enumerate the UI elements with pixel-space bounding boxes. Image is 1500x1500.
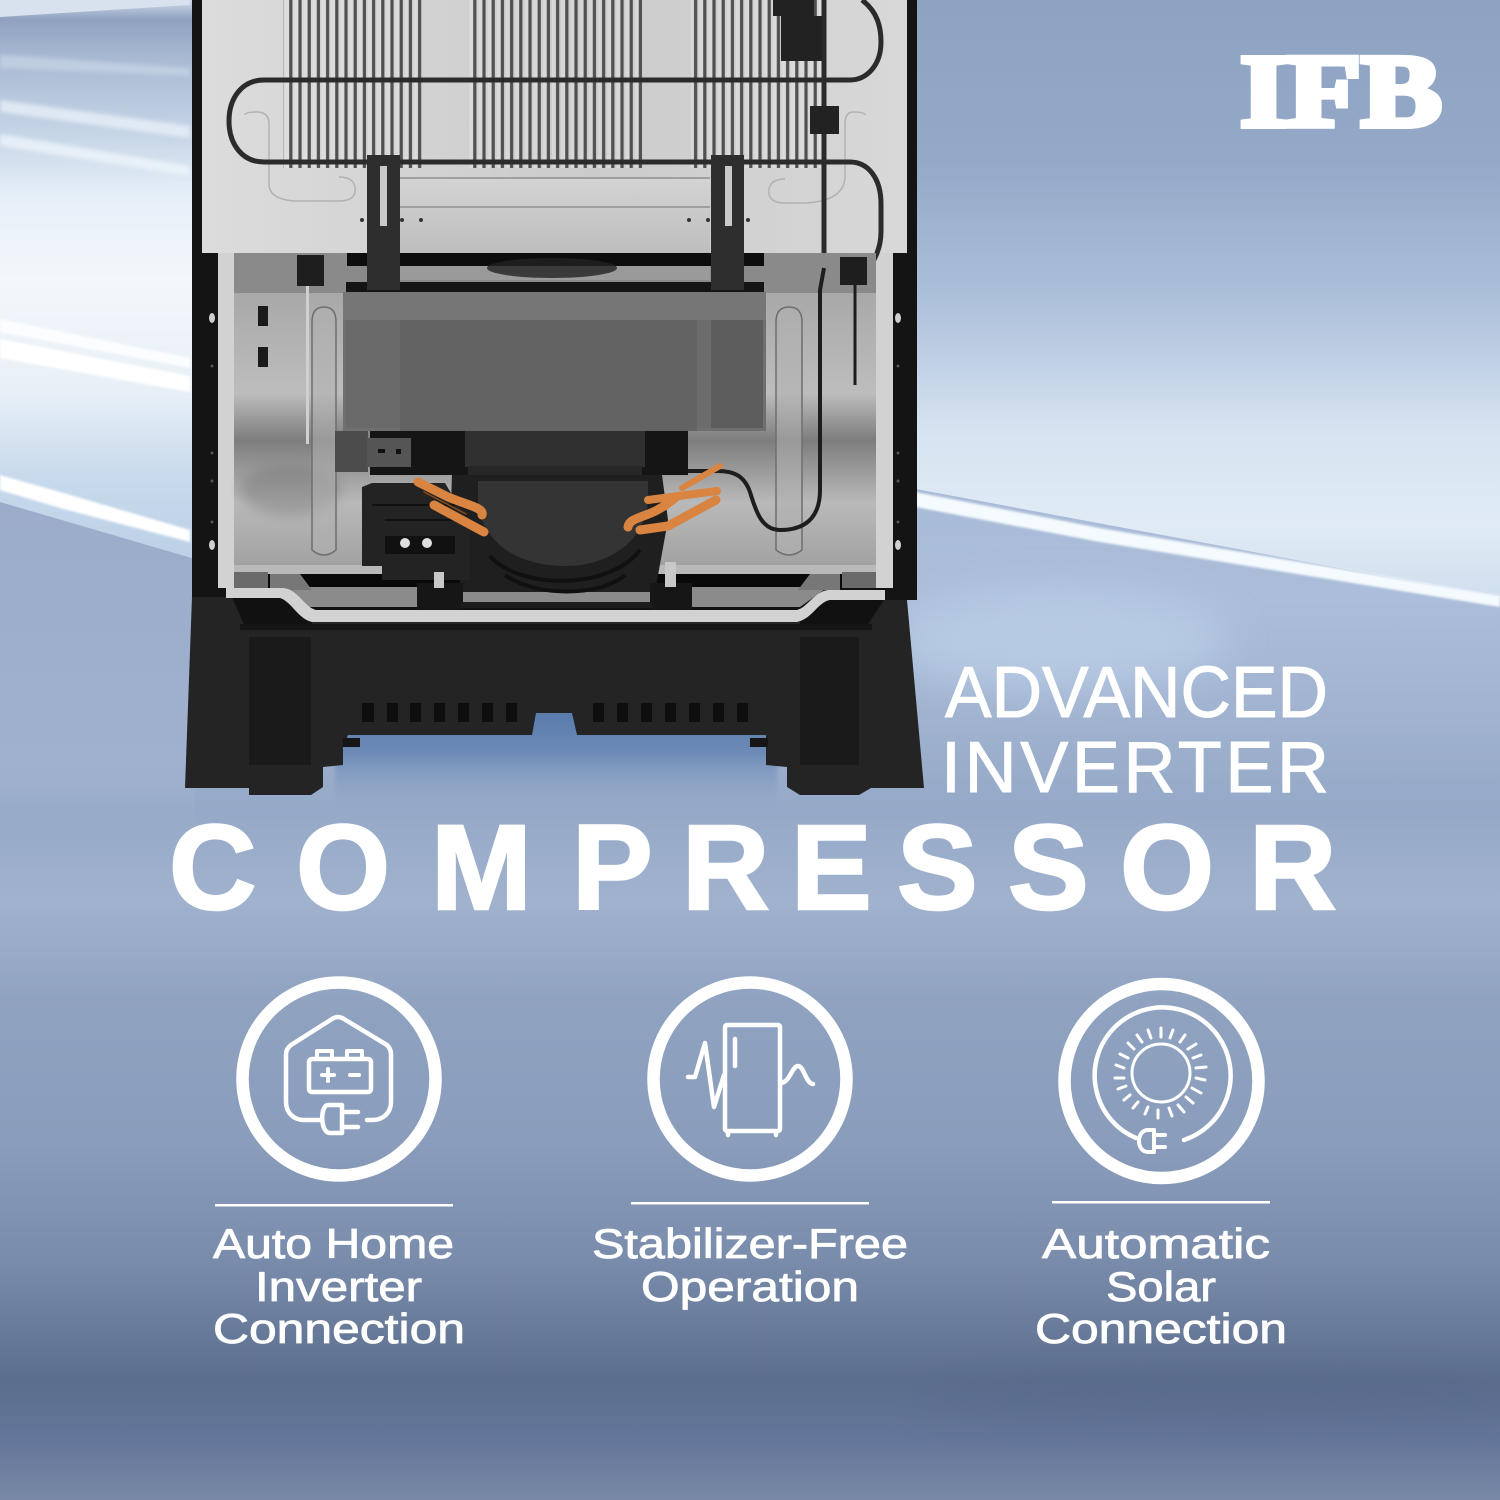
floor ledge and rails	[225, 565, 885, 640]
label: Automatic	[1042, 1220, 1270, 1267]
condenser fins	[283, 0, 823, 168]
compressor	[335, 431, 688, 592]
compressor orange tubes	[418, 466, 720, 532]
condenser tube	[229, 0, 881, 295]
clamp blocks on tube	[773, 0, 839, 134]
label	[213, 1220, 465, 1352]
label: Inverter	[255, 1263, 422, 1310]
base vents	[362, 703, 748, 722]
heading: Advanced Inverter Compressor: COMPRESSOR	[169, 799, 1336, 935]
label: Stabilizer-Free	[592, 1220, 908, 1267]
icon: fridge with waveform	[654, 982, 846, 1176]
feature: stabilizer-free operation	[592, 982, 908, 1310]
label	[1035, 1220, 1287, 1352]
plastic base	[185, 597, 924, 795]
label: Connection	[213, 1305, 465, 1352]
mounting brackets	[367, 155, 744, 290]
fridge side walls	[192, 0, 917, 600]
heading: Advanced Inverter Compressor	[169, 653, 1336, 935]
divider	[1052, 1201, 1270, 1204]
refrigerator	[185, 0, 924, 810]
divider	[631, 1202, 869, 1204]
heading: Advanced Inverter Compressor: INVERTER	[941, 728, 1329, 808]
label: Operation	[641, 1263, 859, 1310]
icon: house battery plug	[242, 982, 436, 1176]
heading: Advanced Inverter Compressor: ADVANCED	[945, 653, 1328, 733]
compressor feet	[417, 562, 692, 611]
label: Auto Home	[213, 1220, 454, 1267]
compartment back wall	[234, 253, 876, 565]
divider	[215, 1204, 453, 1206]
icon: sun with plug cable	[1064, 984, 1258, 1178]
condenser tube lower run	[660, 268, 855, 530]
base tray rim	[226, 588, 885, 622]
rear upper panel	[202, 0, 907, 253]
logo: IFB: IFB	[1240, 34, 1442, 149]
evaporation tray	[343, 292, 766, 431]
feature: automatic solar connection	[1035, 984, 1287, 1352]
label: Connection	[1035, 1305, 1287, 1352]
label	[592, 1220, 908, 1310]
floor under base	[335, 705, 777, 810]
label: Solar	[1106, 1263, 1216, 1310]
feature: auto home inverter connection	[213, 982, 465, 1352]
